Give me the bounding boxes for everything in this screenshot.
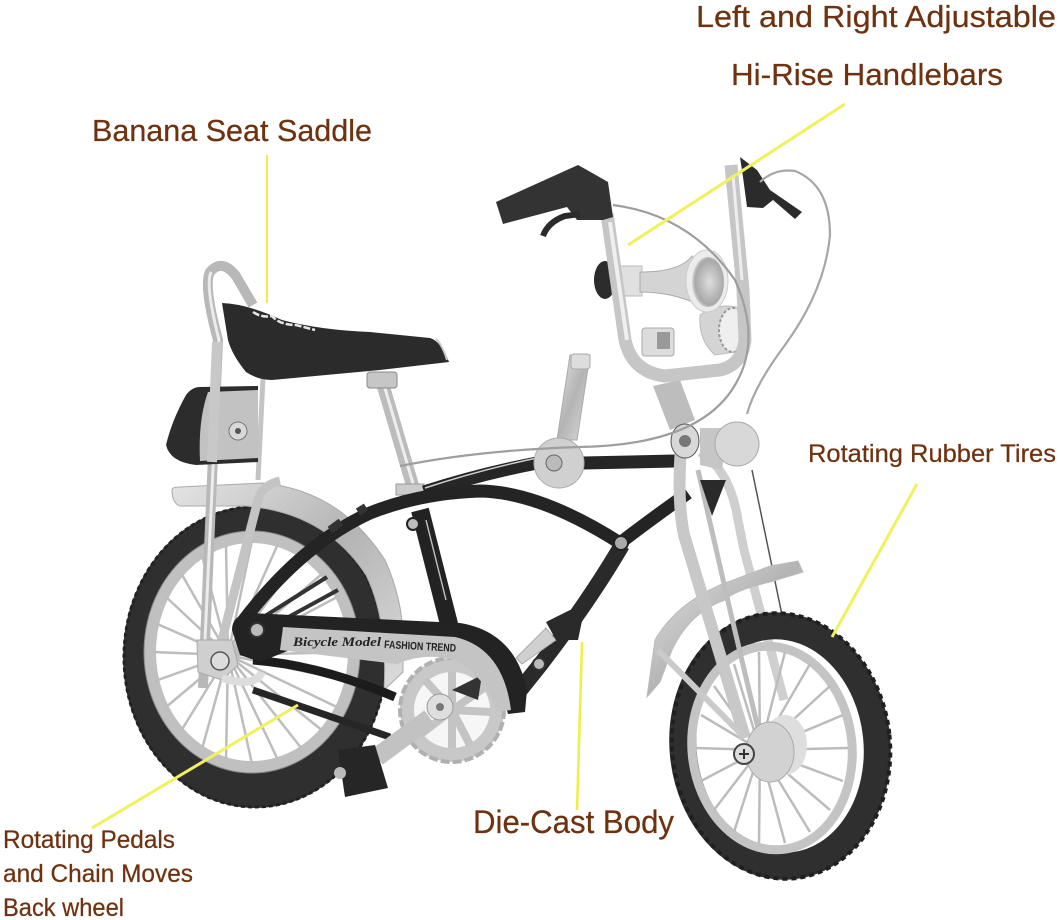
label: handlebars xyxy=(696,0,1056,92)
label: pedals: Rotating Pedals xyxy=(3,826,175,854)
horn xyxy=(594,250,748,356)
front wheel xyxy=(659,602,903,890)
callout line: pedals xyxy=(92,705,298,828)
label: tires: Rotating Rubber Tires xyxy=(808,440,1056,468)
callout line: die-cast body xyxy=(577,642,582,810)
rear wheel xyxy=(123,506,387,808)
label: pedals xyxy=(3,826,193,920)
chain and pedal stays xyxy=(253,577,395,737)
callout line: tires xyxy=(832,484,917,637)
rear fender xyxy=(172,483,403,690)
label: handlebars: Left and Right Adjustable xyxy=(696,0,1056,34)
rear axle xyxy=(197,640,262,682)
head tube xyxy=(653,380,759,470)
banana seat xyxy=(222,303,449,380)
bicycle xyxy=(123,157,903,890)
crank and pedal xyxy=(334,694,453,797)
seat post xyxy=(367,372,424,495)
guard lettering: Bicycle Model xyxy=(292,634,381,649)
callout line: handlebars xyxy=(628,104,845,245)
front fork xyxy=(658,448,762,745)
right grip and lever xyxy=(740,157,802,219)
brake cables xyxy=(400,205,748,466)
callout line: seat xyxy=(266,155,268,303)
right pedal and bottom bracket xyxy=(516,610,583,670)
left grip and lever xyxy=(496,165,613,236)
handlebars xyxy=(400,157,830,466)
chain guard xyxy=(232,613,527,714)
label: seat: Banana Seat Saddle xyxy=(92,113,372,148)
backrest pad xyxy=(166,342,258,465)
front hub xyxy=(734,722,794,782)
crank sprocket xyxy=(400,658,504,762)
label: body: Die-Cast Body xyxy=(473,804,674,840)
sissy bar xyxy=(203,266,280,688)
frame xyxy=(240,458,688,690)
guard brand text: FASHION TREND xyxy=(384,639,456,655)
rear fork leg and fender behind the front tire xyxy=(647,452,803,700)
label: handlebars: Hi-Rise Handlebars xyxy=(731,57,1003,92)
label: pedals: and Chain Moves xyxy=(3,860,193,888)
gear shifter xyxy=(534,354,590,488)
